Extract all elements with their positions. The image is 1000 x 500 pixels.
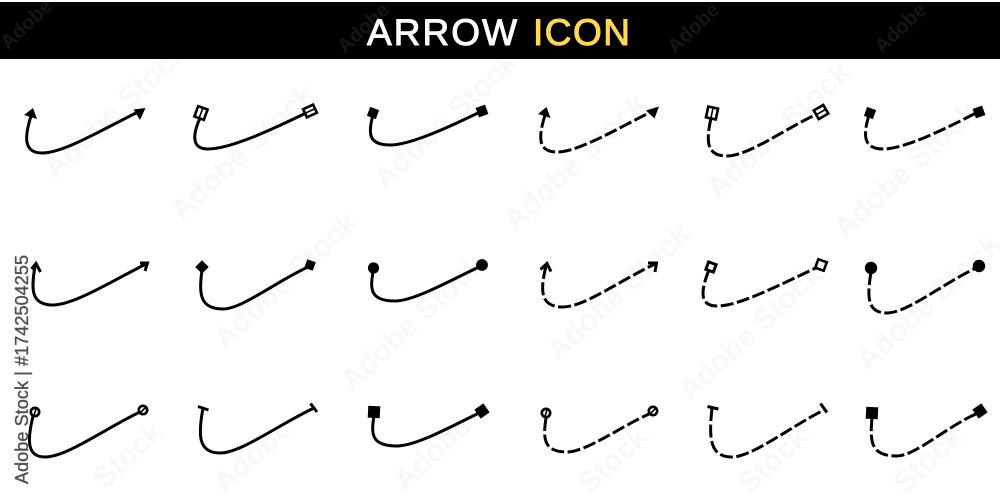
row 1 icon 4: dashed line with triangle arrowheads — [538, 106, 659, 152]
title bar: Adobe — [870, 0, 931, 58]
infographic canvas: Adobe Stock — [334, 248, 491, 397]
title text: ARROW — [367, 12, 517, 53]
row 3 icon 4: dashed line with outlined circle ends — [542, 407, 657, 452]
infographic canvas: Adobe Stock — [497, 88, 654, 237]
infographic canvas: Stock — [887, 420, 970, 500]
row 1 icon 2: solid line with outlined square ends — [194, 105, 317, 149]
infographic canvas: Adobe Stock — [672, 258, 829, 407]
infographic canvas: Adobe — [207, 412, 298, 500]
infographic canvas: Adobe Stock — [540, 218, 697, 367]
infographic canvas: Adobe — [387, 409, 478, 497]
infographic canvas: Adobe Stock — [700, 56, 857, 205]
infographic canvas: Adobe Stock — [367, 46, 524, 195]
infographic canvas: Stock — [572, 420, 655, 500]
row 3 icon 5: dashed line with T-bar ends — [708, 404, 827, 457]
row 2 icon 2: solid line with small diamond ends — [196, 259, 316, 309]
infographic canvas: Adobe Stock — [827, 96, 984, 245]
infographic canvas: Adobe Stock — [207, 206, 364, 355]
title bar — [0, 0, 1000, 59]
row 2 icon 4: dashed line with open arrowheads — [540, 263, 656, 307]
row 3 icon 2: solid line with T-bar ends — [198, 404, 317, 453]
row 1 icon 3: solid line with filled square ends — [367, 105, 488, 145]
title bar: Adobe — [333, 0, 394, 58]
infographic canvas: Stock — [87, 415, 170, 495]
row 2 icon 3: solid line with filled circle ends — [368, 259, 488, 301]
row 1 icon 1: solid line with triangle arrowheads — [24, 108, 146, 153]
row 2 icon 6: dashed line with filled circle ends — [865, 260, 985, 313]
row 2 icon 5: dashed line with small outlined square ends — [703, 259, 827, 306]
row 3 icon 3: solid line with large filled square ends — [368, 403, 490, 446]
row 3 icon 1: solid line with outlined circle ends — [29, 406, 147, 457]
vertical stock credit: Adobe Stock | #1742504255 — [12, 255, 32, 484]
row 1 icon 5: dashed line with outlined square ends — [706, 105, 828, 156]
infographic canvas: Adobe Stock — [164, 78, 321, 227]
row 3 icon 6: dashed line with large filled square ends — [866, 403, 988, 456]
row 1 icon 6: dashed line with filled square ends — [864, 106, 985, 149]
infographic canvas: Adobe Stock — [37, 36, 194, 185]
row 2 icon 1: solid line with open arrowheads — [32, 263, 148, 305]
title bar: Adobe — [663, 0, 724, 58]
infographic canvas: Stock — [732, 420, 815, 500]
title text: ICON — [533, 12, 630, 53]
